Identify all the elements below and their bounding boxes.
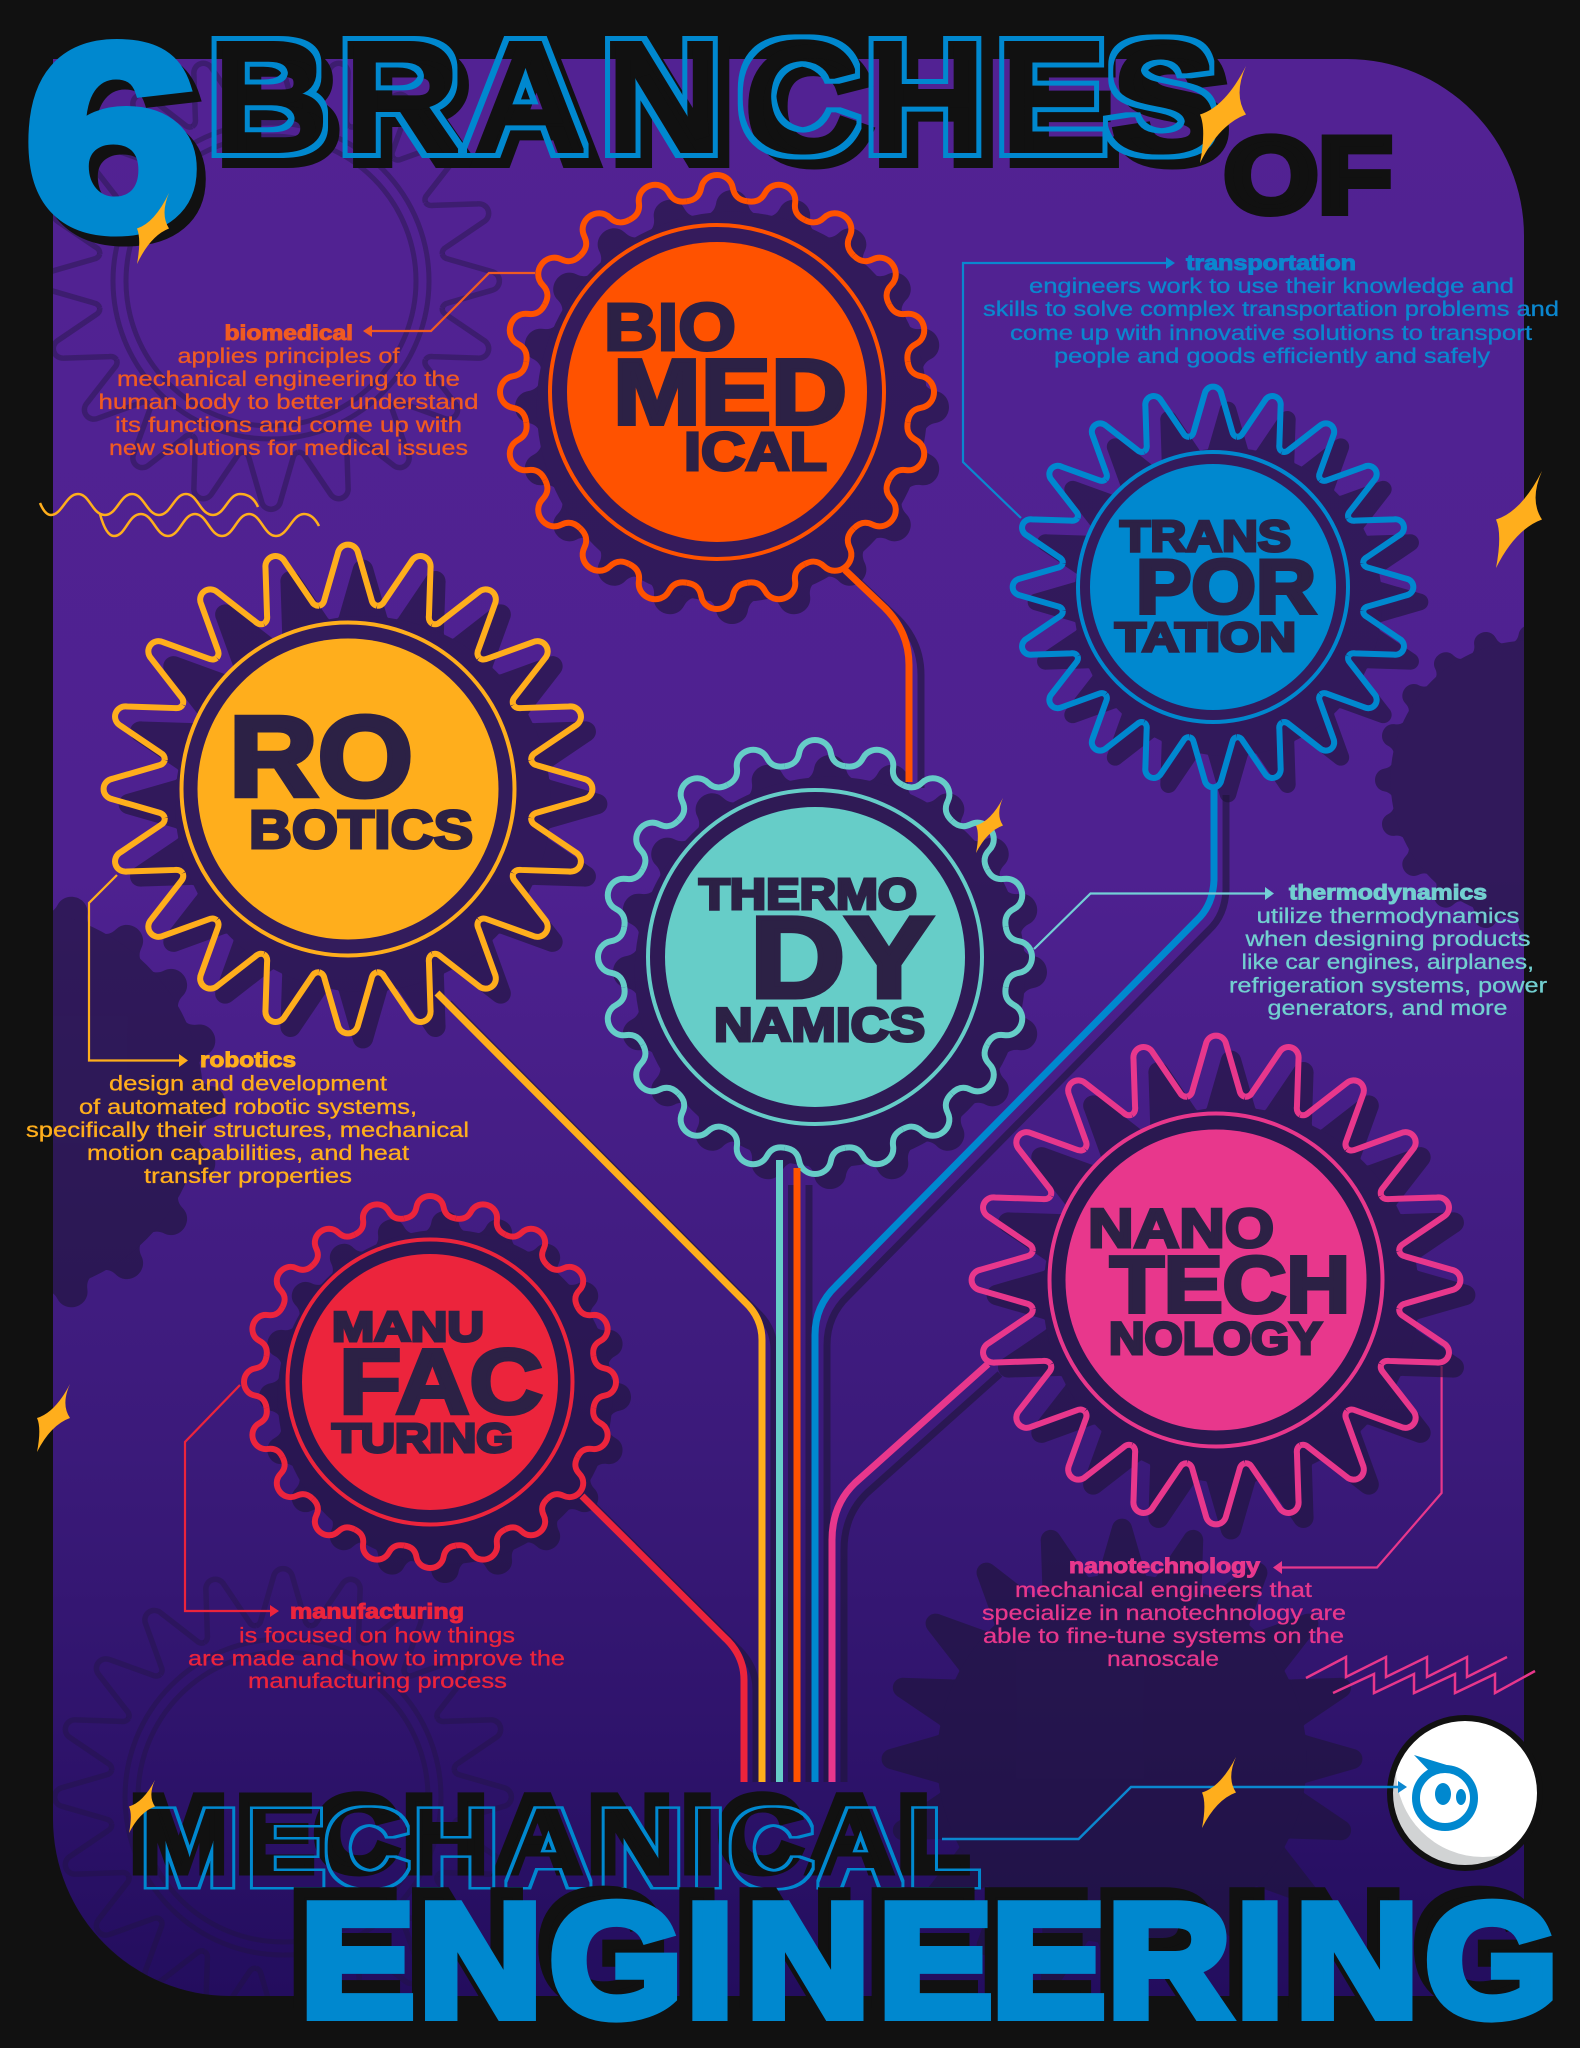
- text block: robotics: motion capabilities, and heat: [87, 1142, 409, 1165]
- gear word: robotics: RO: [229, 694, 413, 821]
- pink zigzags: [1306, 1657, 1535, 1693]
- connector: nanotechnology: [1273, 1366, 1442, 1574]
- gear: nanotechnology: [972, 1036, 1475, 1539]
- text block: biomedical: applies principles of: [178, 345, 400, 368]
- gear word: transportation: TATION: [1115, 614, 1296, 660]
- gear word: biomedical: ICAL: [684, 422, 827, 482]
- filled spiked gear bottom right: [882, 1519, 1362, 1999]
- icon: sparkle by MECHANICAL: [129, 1780, 155, 1833]
- text block: manufacturing: [188, 1600, 565, 1693]
- text block: transportation: engineers work to use their knowledge and: [1029, 275, 1514, 298]
- text block: thermodynamics: like car engines, airplanes,: [1242, 951, 1534, 974]
- gear word: thermodynamics: [699, 870, 933, 1051]
- icon: sparkle right edge: [1496, 471, 1542, 568]
- gear word: biomedical: MED: [613, 340, 847, 444]
- gear: robotics: [104, 545, 607, 1048]
- text block: robotics: specifically their structures, mechanical: [26, 1119, 469, 1142]
- connector: title to robot ball: [942, 1781, 1407, 1839]
- text block: robotics: robotics: [200, 1049, 296, 1072]
- gear word: manufacturing: MANU: [332, 1303, 484, 1350]
- gear word: manufacturing: [332, 1303, 543, 1461]
- gear: biomedical: [500, 175, 949, 624]
- text block: biomedical: mechanical engineering to the: [117, 368, 460, 391]
- text block: biomedical: its functions and come up with: [115, 414, 462, 437]
- text block: biomedical: biomedical: [224, 322, 353, 345]
- text block: biomedical: human body to better understand: [98, 391, 478, 414]
- text block: thermodynamics: when designing products: [1244, 928, 1530, 951]
- text block: transportation: people and goods efficiently and safely: [1054, 345, 1491, 368]
- title: BRANCHES: BRANCHES: [218, 20, 1228, 195]
- gear word: biomedical: [604, 290, 847, 482]
- icon: sparkle by BRANCHES: [1200, 66, 1246, 163]
- faint outline gear bottom left: [55, 1569, 511, 2025]
- text block: transportation: [983, 252, 1559, 368]
- gear: thermodynamics: [598, 740, 1047, 1189]
- connector: transportation: [963, 257, 1175, 518]
- line: robotics: [437, 993, 762, 1782]
- text block: manufacturing: is focused on how things: [239, 1624, 515, 1648]
- text block: thermodynamics: utilize thermodynamics: [1256, 905, 1520, 928]
- gear word: thermodynamics: THERMO: [699, 870, 917, 919]
- text block: nanotechnology: nanotechnology: [1069, 1555, 1260, 1578]
- icon: sparkle on thermodynamics gear: [976, 798, 1003, 853]
- title: 6: 6: [33, 1, 210, 294]
- text block: manufacturing: manufacturing process: [248, 1670, 507, 1693]
- gear word: transportation: TRANS: [1120, 512, 1291, 561]
- text block: biomedical: new solutions for medical issues: [109, 437, 468, 460]
- icon: sparkle on connector: [1202, 1757, 1236, 1828]
- gear word: thermodynamics: DY: [750, 894, 933, 1022]
- gear: transportation: [1013, 387, 1428, 802]
- gear word: biomedical: BIO: [604, 290, 736, 365]
- text block: nanotechnology: [982, 1555, 1346, 1671]
- text block: robotics: transfer properties: [144, 1165, 352, 1188]
- text block: robotics: [26, 1049, 469, 1188]
- line: transportation: [815, 785, 1214, 1782]
- title: OF: OF: [1224, 115, 1392, 235]
- connector: robotics: [89, 875, 188, 1067]
- gear word: nanotechnology: NANO: [1088, 1197, 1274, 1259]
- text block: nanotechnology: able to fine-tune systems on the: [983, 1625, 1344, 1648]
- text block: thermodynamics: generators, and more: [1268, 997, 1508, 1020]
- text block: manufacturing: manufacturing: [290, 1600, 464, 1624]
- text block: thermodynamics: refrigeration systems, power: [1229, 974, 1547, 998]
- text block: thermodynamics: thermodynamics: [1289, 882, 1487, 904]
- text block: biomedical: [98, 322, 478, 460]
- branch lines: [437, 570, 1214, 1782]
- icon: robot ball: [1387, 1715, 1537, 1871]
- line: nanotechnology: [832, 1364, 988, 1782]
- gear word: robotics: BOTICS: [249, 800, 473, 860]
- icon: sparkle left edge: [37, 1384, 70, 1452]
- line: biomedical: [797, 570, 909, 1782]
- title: ENGINEERING: ENGINEERING: [288, 1858, 1545, 2038]
- connector: biomedical: [363, 273, 535, 337]
- title: BRANCHES: BRANCHES: [207, 10, 1217, 185]
- text block: nanotechnology: nanoscale: [1107, 1648, 1219, 1671]
- text block: transportation: transportation: [1186, 252, 1356, 275]
- text block: manufacturing: are made and how to improve the: [188, 1648, 565, 1670]
- gear word: thermodynamics: NAMICS: [714, 998, 925, 1051]
- text block: robotics: of automated robotic systems,: [79, 1096, 417, 1119]
- filled gear left: [53, 896, 224, 1308]
- filled gear right: [1375, 626, 1524, 934]
- gear word: robotics: [229, 694, 473, 860]
- text block: nanotechnology: mechanical engineers that: [1015, 1579, 1312, 1602]
- line: manufacturing: [582, 1496, 744, 1782]
- gear word: nanotechnology: [1088, 1197, 1350, 1364]
- line: thermodynamics: [776, 1160, 783, 1782]
- text block: transportation: come up with innovative solutions to transport: [1010, 322, 1532, 345]
- connector: thermodynamics: [1034, 887, 1274, 949]
- connector: manufacturing: [185, 1385, 279, 1617]
- gear word: nanotechnology: NOLOGY: [1109, 1313, 1322, 1364]
- text block: thermodynamics: [1229, 882, 1547, 1020]
- branch lines shadow: [449, 580, 1226, 1782]
- text block: robotics: design and development: [109, 1072, 387, 1096]
- gear word: transportation: POR: [1136, 545, 1316, 630]
- title: ENGINEERING: ENGINEERING: [301, 1871, 1558, 2048]
- yellow squiggles: [40, 494, 319, 536]
- faint outline gear top left: [43, 53, 499, 509]
- gear word: nanotechnology: TECH: [1110, 1240, 1350, 1329]
- gear: manufacturing: [244, 1196, 631, 1583]
- gear word: manufacturing: FAC: [339, 1331, 543, 1433]
- text block: transportation: skills to solve complex transportation problems and: [983, 298, 1559, 321]
- gear word: transportation: [1115, 512, 1316, 660]
- icon: sparkle by 6: [137, 193, 169, 264]
- gear word: manufacturing: TURING: [332, 1415, 513, 1461]
- title: MECHANICAL: MECHANICAL: [130, 1773, 969, 1894]
- title: MECHANICAL: MECHANICAL: [141, 1787, 980, 1908]
- text block: nanotechnology: specialize in nanotechnology are: [982, 1602, 1346, 1625]
